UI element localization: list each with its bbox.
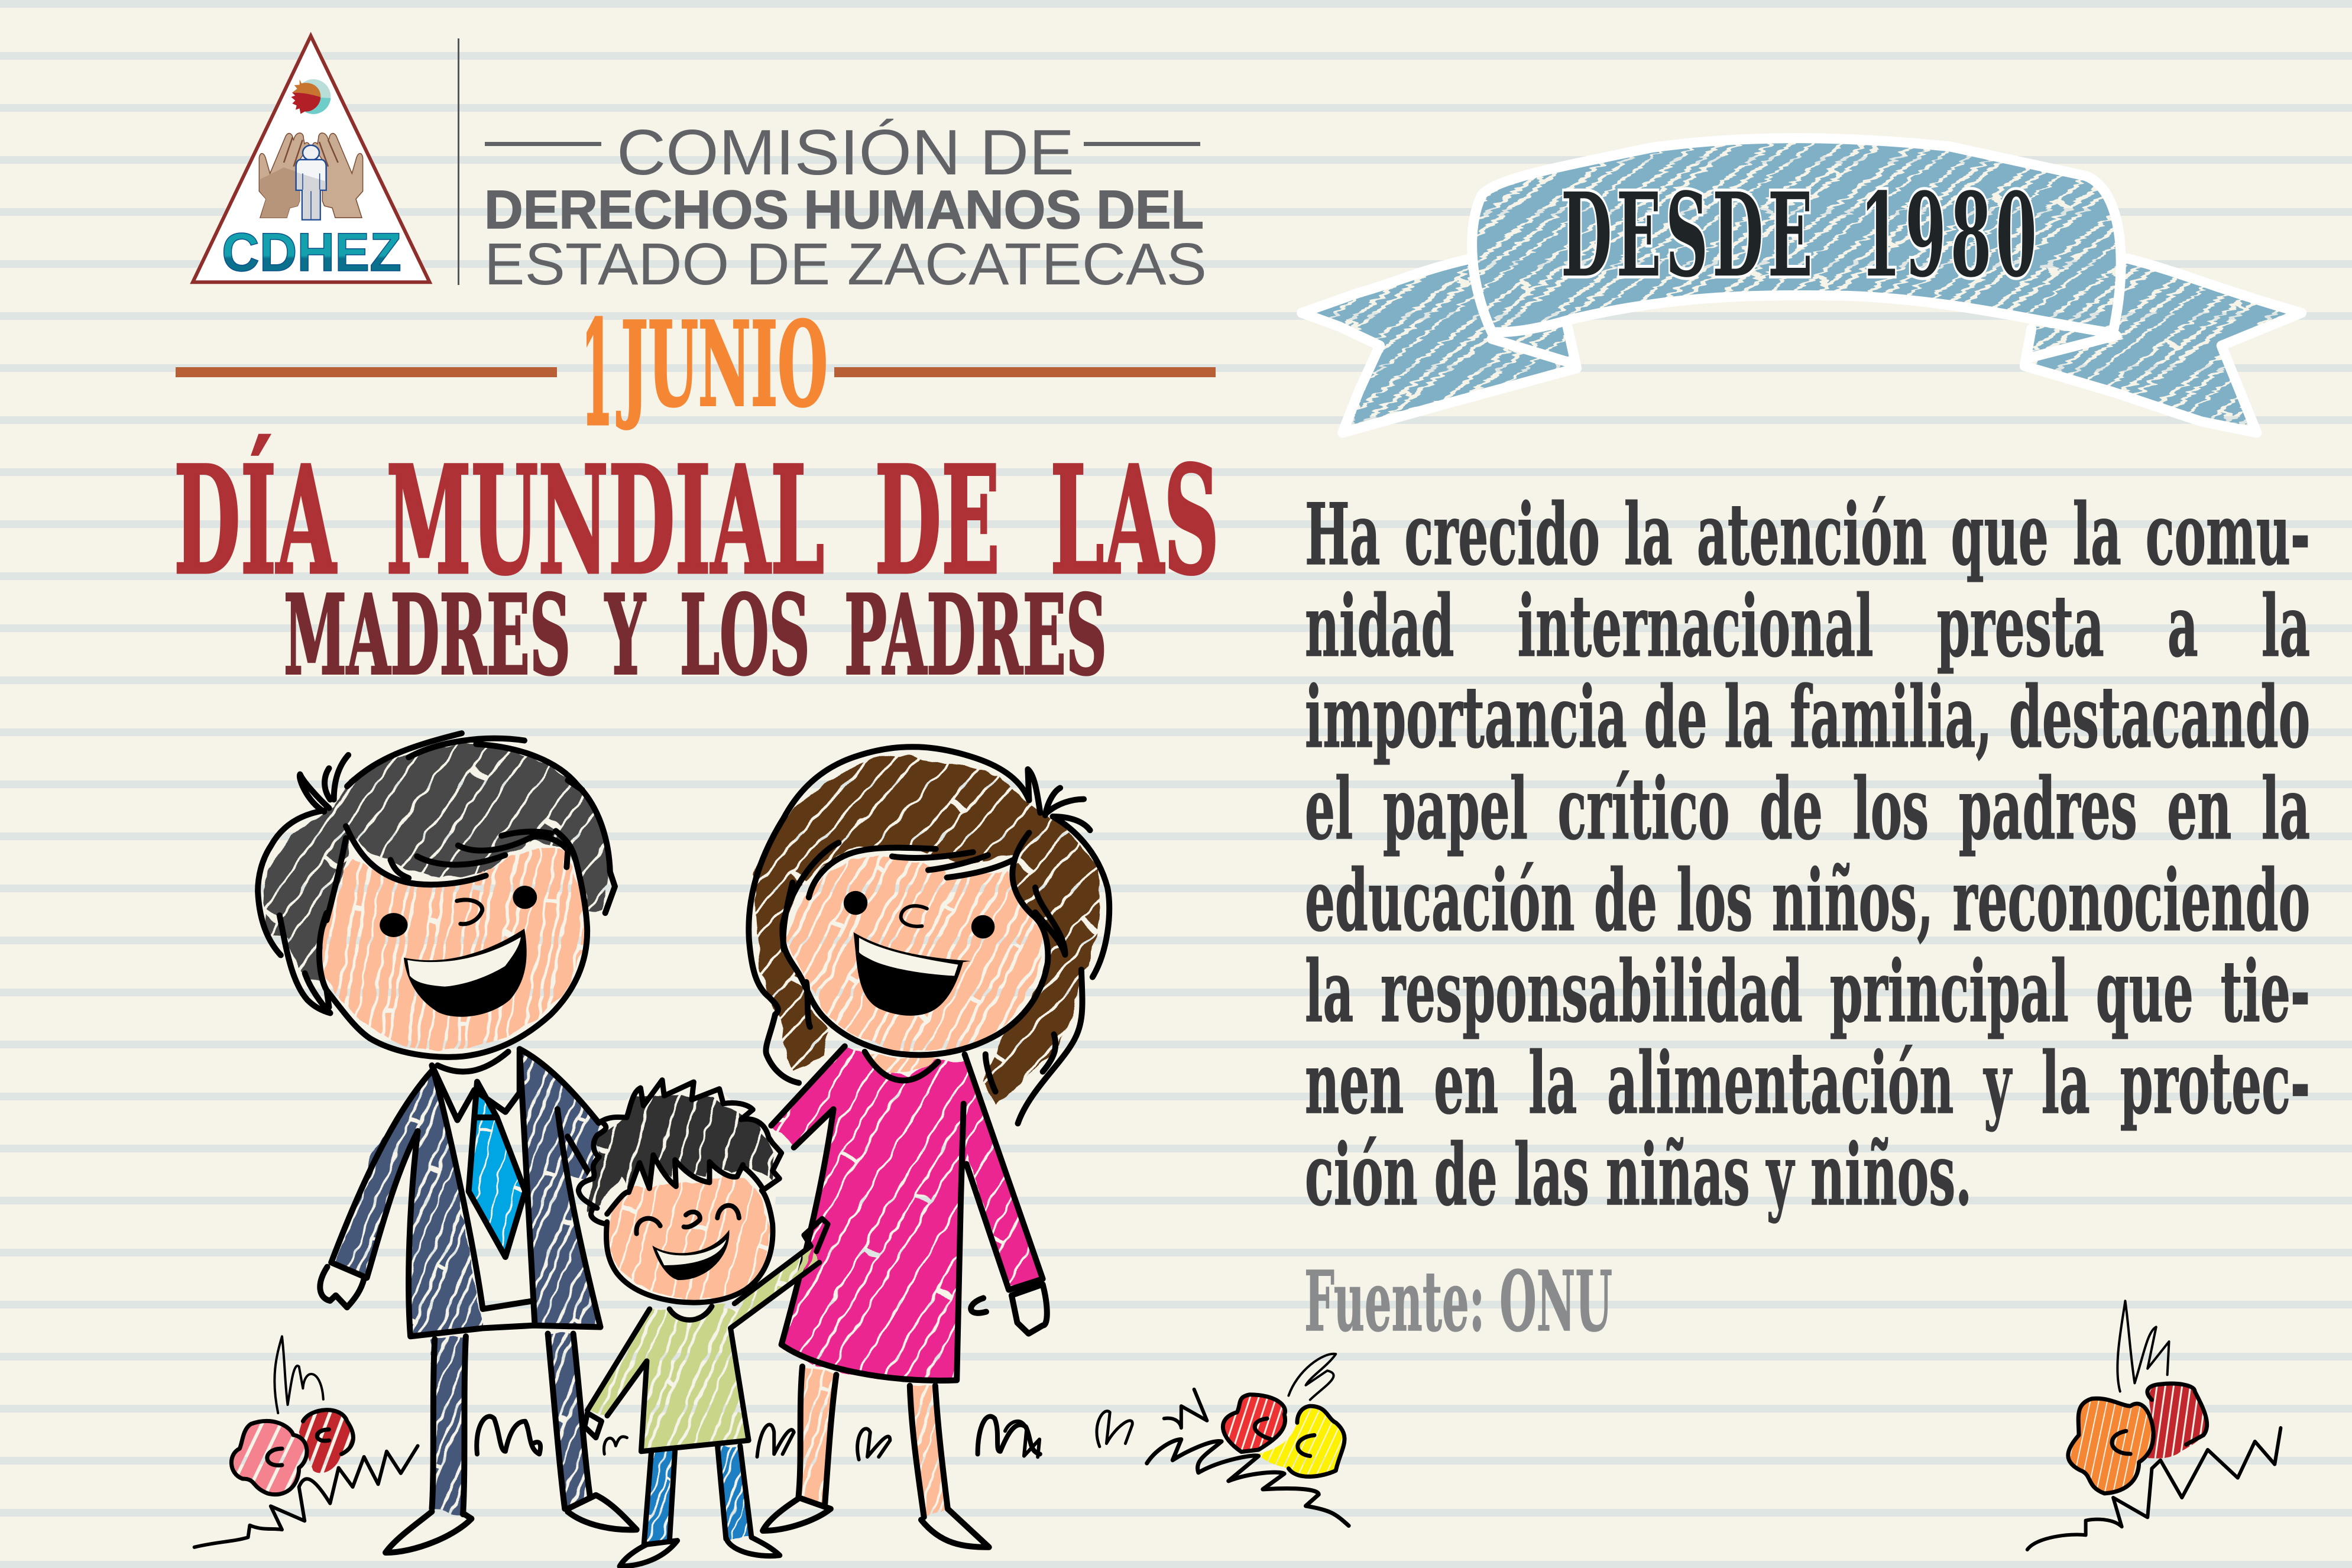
woman's head: [749, 747, 1109, 1123]
boy's body: [585, 1219, 828, 1566]
woman's dress: [771, 1049, 1043, 1380]
man's trousers and shoes: [385, 1334, 637, 1553]
woman's body: [763, 1046, 1047, 1547]
body paragraph: Ha crecido la atención que la comu-: [1305, 485, 2310, 584]
flower: orange and red: [2027, 1301, 2280, 1550]
woman's hair: [754, 754, 1100, 1107]
ribbon outline: [1302, 138, 2302, 433]
man's tie: [469, 1082, 525, 1257]
man's jacket: [330, 1052, 599, 1334]
icon: sun flame: [291, 79, 331, 114]
flower: red and yellow: [1147, 1354, 1349, 1525]
grass tufts: [477, 1417, 1040, 1460]
body paragraph: [1305, 485, 2310, 1224]
body paragraph: importancia de la familia, destacando: [1305, 668, 2310, 767]
header: organisation name: DERECHOS HUMANOS DEL: [484, 180, 1204, 240]
flowers and grass: bottom centre and right: [1005, 1301, 2280, 1550]
header: organisation name: ESTADO DE ZACATECAS: [484, 231, 1207, 297]
man's face: [322, 847, 585, 1051]
icon: hands and person: [259, 133, 363, 220]
date heading: 1 JUNIO: JUNIO: [617, 297, 828, 433]
man's head: [258, 733, 615, 1057]
body paragraph: la responsabilidad principal que tie-: [1305, 942, 2310, 1041]
header: organisation name: COMISIÓN DE: [617, 116, 1074, 189]
flower: pink and red: [195, 1336, 418, 1547]
subtitle: MADRES Y LOS PADRES: [284, 571, 1107, 699]
man: [258, 733, 637, 1553]
man's body: [320, 1049, 637, 1553]
man's hair: [264, 744, 607, 983]
woman's neck: [871, 1053, 936, 1074]
woman: [749, 747, 1109, 1547]
boy: [578, 1080, 828, 1566]
body paragraph: educación de los niños, reconociendo: [1305, 851, 2310, 950]
boy's hair: [587, 1096, 775, 1212]
woman's outlines and features: [749, 747, 1109, 1123]
body paragraph: nen en la alimentación y la protec-: [1305, 1034, 2310, 1133]
body paragraph: ción de las niñas y niños.: [1305, 1125, 1972, 1224]
woman's legs and shoes: [763, 1366, 989, 1547]
logo wordmark CDHEZ: CDHEZ: [222, 222, 401, 283]
boy's legs and shoes: [620, 1446, 780, 1566]
boy's shirt: [588, 1246, 819, 1452]
date heading: 1 JUNIO: [176, 290, 1216, 457]
logo triangle frame: [193, 36, 430, 282]
source note: Fuente: ONU: [1304, 1253, 1612, 1350]
illustration: family: [195, 733, 1109, 1566]
man's outlines and features: [258, 733, 615, 1057]
date heading: 1 JUNIO: 1: [582, 290, 613, 457]
vertical divider: [458, 38, 459, 285]
grass and pink flower: [195, 1336, 1040, 1547]
boy's head: [578, 1080, 782, 1303]
woman's dress outlines: [771, 1046, 1047, 1381]
title: DÍA MUNDIAL DE LAS: [174, 433, 1219, 607]
woman's face: [786, 856, 1041, 1051]
grass tufts: [1005, 1411, 1132, 1457]
boy's shirt outlines: [585, 1219, 828, 1452]
ribbon banner: [1302, 138, 2302, 433]
body paragraph: el papel crítico de los padres en la: [1305, 759, 2310, 858]
header: organisation name: [484, 116, 1207, 297]
boy's outlines and features: [578, 1080, 782, 1303]
ribbon centre band: [1473, 140, 2120, 332]
body paragraph: nidad internacional presta a la: [1305, 576, 2310, 676]
boy's head backing: [578, 1088, 782, 1303]
boy's face: [608, 1177, 769, 1300]
logo: CDHEZ triangle: [193, 36, 430, 282]
man's outlines: [320, 1049, 601, 1336]
ribbon tails: [1312, 258, 2289, 424]
